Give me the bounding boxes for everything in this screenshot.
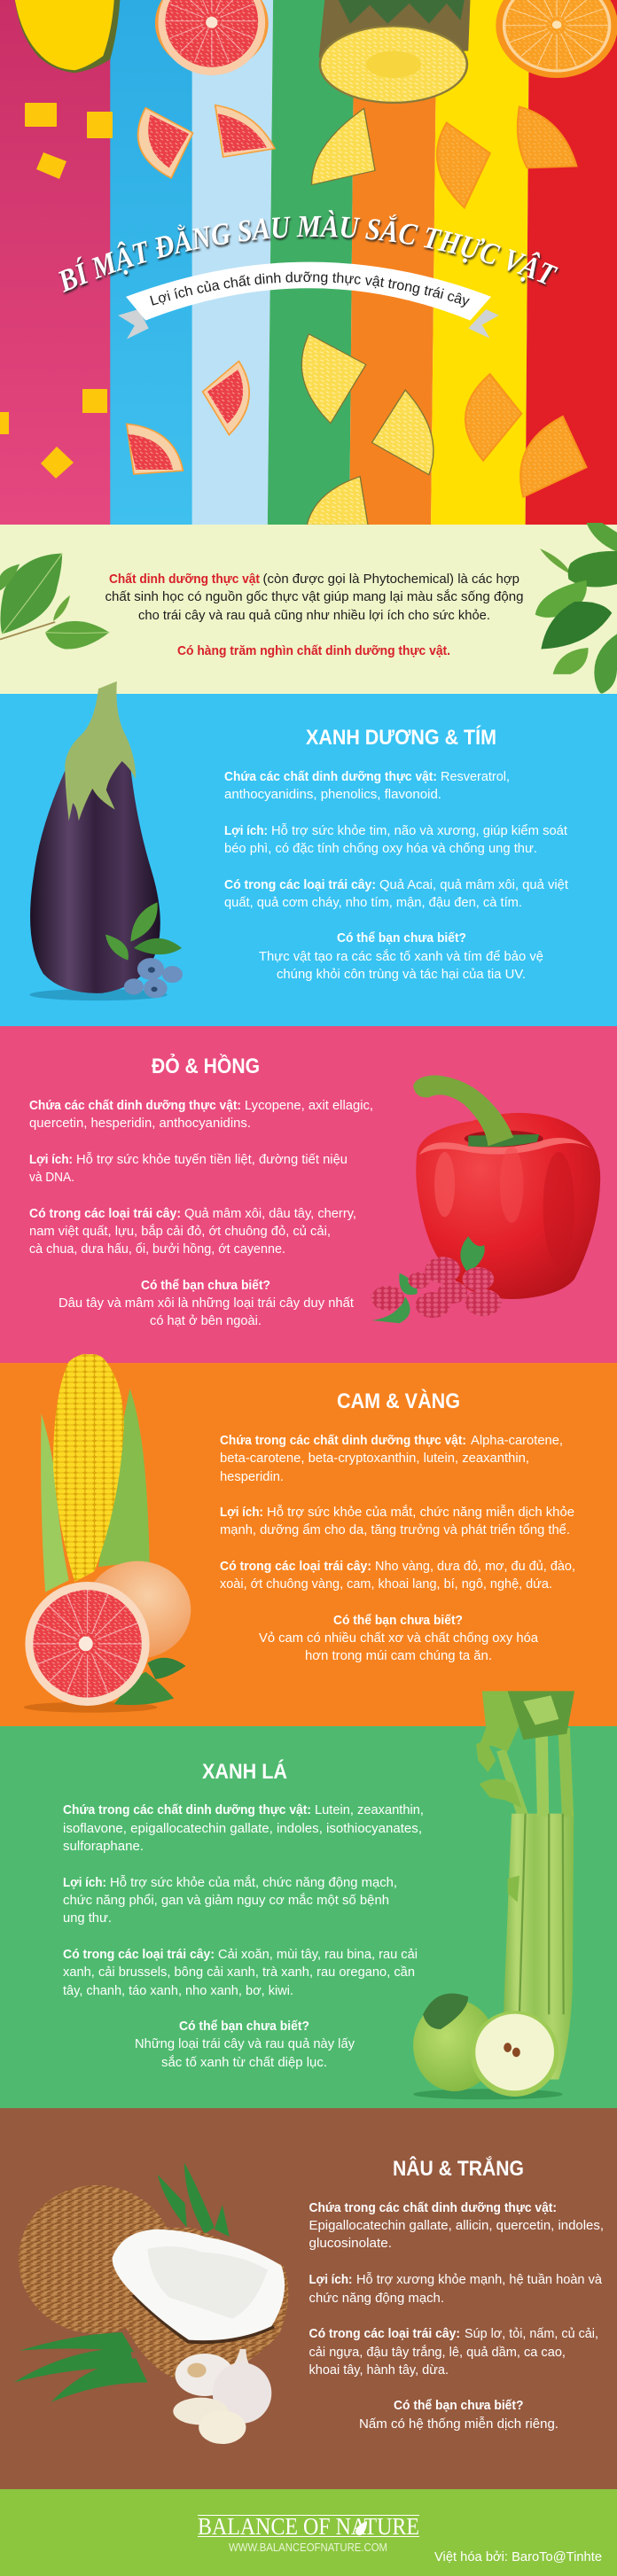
text block: Có thể bạn chưa biết? bbox=[141, 1278, 270, 1293]
text block: Dâu tây và mâm xôi là những loại trái cây duy nhất bbox=[59, 1296, 355, 1311]
text block: ung thư. bbox=[63, 1911, 112, 1926]
text block bbox=[63, 1802, 424, 2070]
website url: WWW.BALANCEOFNATURE.COM bbox=[229, 2541, 387, 2554]
panel: hero banner: Lợi ích của chất dinh dưỡng thực vật trong trái cây bbox=[150, 271, 470, 307]
text block: Có thể bạn chưa biết? bbox=[333, 1613, 463, 1628]
credit: Việt hóa bởi: BaroTo@Tinhte bbox=[434, 2549, 602, 2564]
text block: beta-carotene, beta-cryptoxanthin, lutein, zeaxanthin, bbox=[220, 1451, 529, 1466]
text block bbox=[308, 2200, 604, 2432]
text block: hesperidin. bbox=[220, 1469, 284, 1484]
text block bbox=[220, 1433, 575, 1663]
heading: ĐỎ & HỒNG bbox=[152, 1053, 260, 1078]
heading: XANH LÁ bbox=[202, 1759, 287, 1784]
text block: quercetin, hesperidin, anthocyanidins. bbox=[29, 1116, 251, 1131]
heading: CAM & VÀNG bbox=[337, 1389, 460, 1413]
intro text: (còn được gọi là Phytochemical) là các hợp bbox=[262, 572, 519, 587]
panel: introduction bbox=[0, 523, 617, 694]
text block: Có trong các loại trái cây: bbox=[224, 877, 376, 892]
text block: Có trong các loại trái cây: bbox=[29, 1206, 181, 1221]
intro text: Có hàng trăm nghìn chất dinh dưỡng thực vật. bbox=[177, 643, 450, 658]
panel: brown and white bbox=[0, 2108, 617, 2490]
text block: Lycopene, axit ellagic, bbox=[245, 1098, 373, 1113]
text block: Lutein, zeaxanthin, bbox=[315, 1802, 424, 1817]
text block: Resveratrol, bbox=[441, 769, 510, 784]
text block: Có thể bạn chưa biết? bbox=[179, 2019, 309, 2034]
panel: footer bbox=[0, 2489, 617, 2576]
text block: isoflavone, epigallocatechin gallate, indoles, isothiocyanates, bbox=[63, 1821, 422, 1836]
text block bbox=[29, 1098, 373, 1328]
text block: sắc tố xanh từ chất diệp lục. bbox=[161, 2055, 327, 2070]
text block bbox=[224, 769, 569, 982]
intro text: Chất dinh dưỡng thực vật bbox=[109, 572, 260, 587]
panel: hero banner bbox=[0, 0, 617, 525]
heading: XANH DƯƠNG & TÍM bbox=[306, 725, 496, 750]
panel: red and pink bbox=[0, 1026, 617, 1363]
text block: Quả Acai, quả mâm xôi, quả việt bbox=[379, 877, 569, 892]
text block: tây, chanh, táo xanh, nho xanh, bơ, kiwi. bbox=[63, 1983, 293, 1998]
text block: chúng khỏi côn trùng và tác hại của tia UV. bbox=[277, 967, 526, 982]
text block: cải ngựa, đậu tây trắng, lê, quả dầm, ca cao, bbox=[308, 2345, 566, 2360]
text block: Alpha-carotene, bbox=[471, 1433, 563, 1448]
icon: leaves right bbox=[535, 523, 617, 694]
panel: blue and purple bbox=[0, 681, 617, 1028]
fruit photo: sliced mango, grapefruit, pineapple, orange bbox=[15, 0, 617, 104]
text block: Lợi ích: bbox=[29, 1152, 73, 1167]
text block: Chứa các chất dinh dưỡng thực vật: bbox=[29, 1098, 241, 1113]
text block: Có trong các loại trái cây: bbox=[308, 2326, 460, 2341]
text block: Hỗ trợ sức khỏe của mắt, chức năng động mạch, bbox=[110, 1875, 397, 1890]
text block: nam việt quất, lựu, bắp cải đỏ, ớt chuông đỏ, củ cải, bbox=[29, 1224, 331, 1239]
ribbon subtitle bbox=[152, 282, 466, 306]
text block: quất, quả cơm cháy, nho tím, mận, đậu đen, cà tím. bbox=[224, 895, 522, 910]
text block: và DNA. bbox=[29, 1170, 74, 1185]
text block: Vỏ cam có nhiều chất xơ và chất chống oxy hóa bbox=[259, 1630, 539, 1646]
text block: Epigallocatechin gallate, allicin, quercetin, indoles, bbox=[308, 2218, 604, 2233]
text block: Nho vàng, dưa đỏ, mơ, đu đủ, đào, bbox=[375, 1559, 575, 1574]
icon: celery and green apples bbox=[413, 1691, 574, 2099]
text block: Quả mâm xôi, dâu tây, cherry, bbox=[184, 1206, 356, 1221]
icon: eggplant and blueberries bbox=[29, 681, 183, 1000]
text block: Những loại trái cây và rau quả này lấy bbox=[135, 2036, 355, 2051]
panel: hero banner: BÍ MẬT ĐẰNG SAU MÀU SẮC THỰC VẬT bbox=[59, 210, 560, 296]
text block: Nấm có hệ thống miễn dịch riêng. bbox=[359, 2416, 558, 2432]
text block: Lợi ích: bbox=[224, 823, 268, 838]
text block: Hỗ trợ xương khỏe mạnh, hệ tuần hoàn và bbox=[356, 2272, 603, 2287]
text block: glucosinolate. bbox=[308, 2236, 392, 2251]
panel: green bbox=[0, 1691, 617, 2108]
text block: Có thể bạn chưa biết? bbox=[394, 2398, 523, 2413]
icon: coconut and garlic bbox=[14, 2162, 288, 2444]
text block: Hỗ trợ sức khỏe tim, não và xương, giúp kiểm soát bbox=[271, 823, 568, 838]
text block: béo phì, có đặc tính chống oxy hóa và chống ung thư. bbox=[224, 841, 537, 856]
intro text: cho trái cây và rau quả cũng như nhiều lợi ích cho sức khỏe. bbox=[138, 608, 490, 623]
text block: khoai tây, hành tây, dừa. bbox=[308, 2362, 449, 2378]
text block: Hỗ trợ sức khỏe tuyến tiền liệt, đường tiết niệu bbox=[76, 1152, 348, 1167]
text block: Hỗ trợ sức khỏe của mắt, chức năng miễn dịch khỏe bbox=[267, 1505, 574, 1520]
text block: Chứa trong các chất dinh dưỡng thực vật: bbox=[308, 2200, 557, 2215]
text block: Lợi ích: bbox=[63, 1875, 106, 1890]
fruit wedges bbox=[127, 105, 586, 525]
text block: Có trong các loại trái cây: bbox=[220, 1559, 371, 1574]
mango cubes bbox=[0, 103, 113, 479]
heading: NÂU & TRẮNG bbox=[393, 2156, 524, 2181]
panel: orange and yellow bbox=[0, 1354, 617, 1726]
text block: cà chua, dưa hấu, ổi, bưởi hồng, ớt cayenne. bbox=[29, 1241, 285, 1257]
text block: chức năng phổi, gan và giảm nguy cơ mắc một số bệnh bbox=[63, 1893, 389, 1908]
text block: Chứa các chất dinh dưỡng thực vật: bbox=[224, 769, 437, 784]
text block: Cải xoăn, mùi tây, rau bina, rau cải bbox=[218, 1947, 418, 1962]
text block: xanh, cải brussels, bông cải xanh, trà xanh, rau oregano, cần bbox=[63, 1965, 415, 1980]
text block: mạnh, dưỡng ẩm cho da, tăng trưởng và phát triển tổng thể. bbox=[220, 1522, 570, 1537]
text block: Có thể bạn chưa biết? bbox=[337, 930, 466, 946]
text block: chức năng động mạch. bbox=[308, 2291, 444, 2306]
text block: Chứa trong các chất dinh dưỡng thực vật: bbox=[63, 1802, 311, 1817]
icon: red bell pepper and raspberries bbox=[371, 1075, 600, 1323]
text block: có hạt ở bên ngoài. bbox=[150, 1313, 262, 1328]
text block: Súp lơ, tỏi, nấm, củ cải, bbox=[465, 2326, 598, 2341]
ribbon banner bbox=[118, 262, 499, 339]
text block: Thực vật tạo ra các sắc tố xanh và tím để bảo vệ bbox=[259, 949, 543, 964]
background colour stripes bbox=[0, 0, 617, 525]
intro text: chất sinh học có nguồn gốc thực vật giúp mang lại màu sắc sống động bbox=[105, 589, 523, 604]
icon: corn and grapefruit bbox=[24, 1354, 191, 1713]
icon: leaves left bbox=[0, 554, 109, 650]
text block: anthocyanidins, phenolics, flavonoid. bbox=[224, 787, 441, 802]
text block: hơn trong múi cam chúng ta ăn. bbox=[305, 1648, 492, 1663]
text block: xoài, ớt chuông vàng, cam, khoai lang, bí, ngô, nghệ, dứa. bbox=[220, 1576, 552, 1592]
text block: Chứa trong các chất dinh dưỡng thực vật: bbox=[220, 1433, 466, 1448]
text block: Lợi ích: bbox=[308, 2272, 353, 2287]
intro text bbox=[105, 572, 523, 658]
main title bbox=[64, 237, 560, 292]
text block: Lợi ích: bbox=[220, 1505, 263, 1520]
text block: Có trong các loại trái cây: bbox=[63, 1947, 215, 1962]
text block: sulforaphane. bbox=[63, 1839, 144, 1854]
logo: Balance of Nature: BALANCE OF NATURE bbox=[198, 2513, 419, 2540]
